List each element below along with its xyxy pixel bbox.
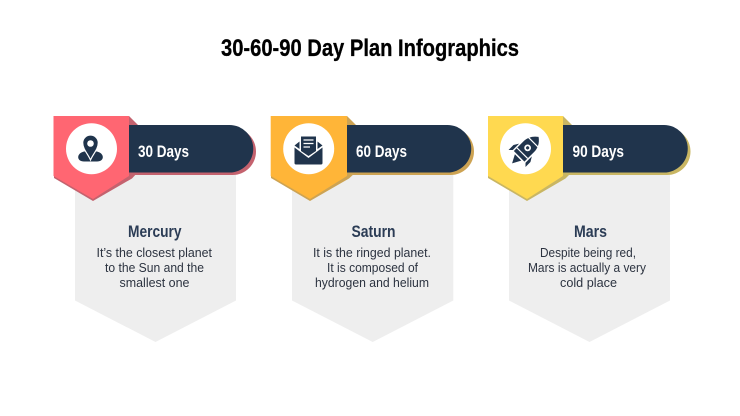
heading: Saturn: Saturn (352, 222, 396, 241)
description: It is composed of (327, 261, 418, 275)
pill shadow (347, 128, 474, 175)
label: 90 Days: 90 Days (572, 142, 624, 161)
card background (509, 170, 670, 342)
banner shadow (488, 116, 572, 201)
banner shadow (54, 116, 138, 201)
icon: map pin (78, 135, 103, 162)
icon: open envelope (294, 136, 322, 164)
description: Mars is actually a very (528, 261, 647, 275)
card background (75, 170, 236, 342)
heading: Mercury: Mercury (128, 222, 182, 241)
description: cold place (560, 276, 617, 290)
pill (563, 125, 688, 172)
label: 60 Days: 60 Days (356, 142, 407, 161)
card background (292, 170, 453, 342)
icon circle (66, 123, 117, 174)
description: to the Sun and the (105, 261, 204, 275)
pill (129, 125, 253, 172)
panel: Saturn 60 days (271, 116, 474, 342)
icon circle (283, 123, 334, 174)
pill (347, 125, 471, 172)
panel: Mercury 30 days (54, 116, 256, 342)
description (528, 246, 647, 290)
pill shadow (129, 128, 256, 175)
pill shadow (563, 128, 690, 175)
icon circle (500, 123, 551, 174)
icon: rocket (504, 128, 547, 172)
title: 30-60-90 Day Plan Infographics (221, 35, 519, 62)
panel: Mars 90 days (488, 116, 690, 342)
heading: Mars: Mars (574, 222, 607, 241)
description: hydrogen and helium (315, 276, 429, 290)
label: 30 Days: 30 Days (138, 142, 189, 161)
banner shadow (271, 116, 356, 201)
description: It’s the closest planet (96, 246, 213, 260)
banner (271, 116, 347, 199)
banner (488, 116, 563, 199)
banner (54, 116, 129, 199)
description: smallest one (120, 276, 190, 290)
description (313, 246, 431, 290)
description: Despite being red, (540, 246, 636, 260)
description: It is the ringed planet. (313, 246, 431, 260)
description (96, 246, 213, 290)
